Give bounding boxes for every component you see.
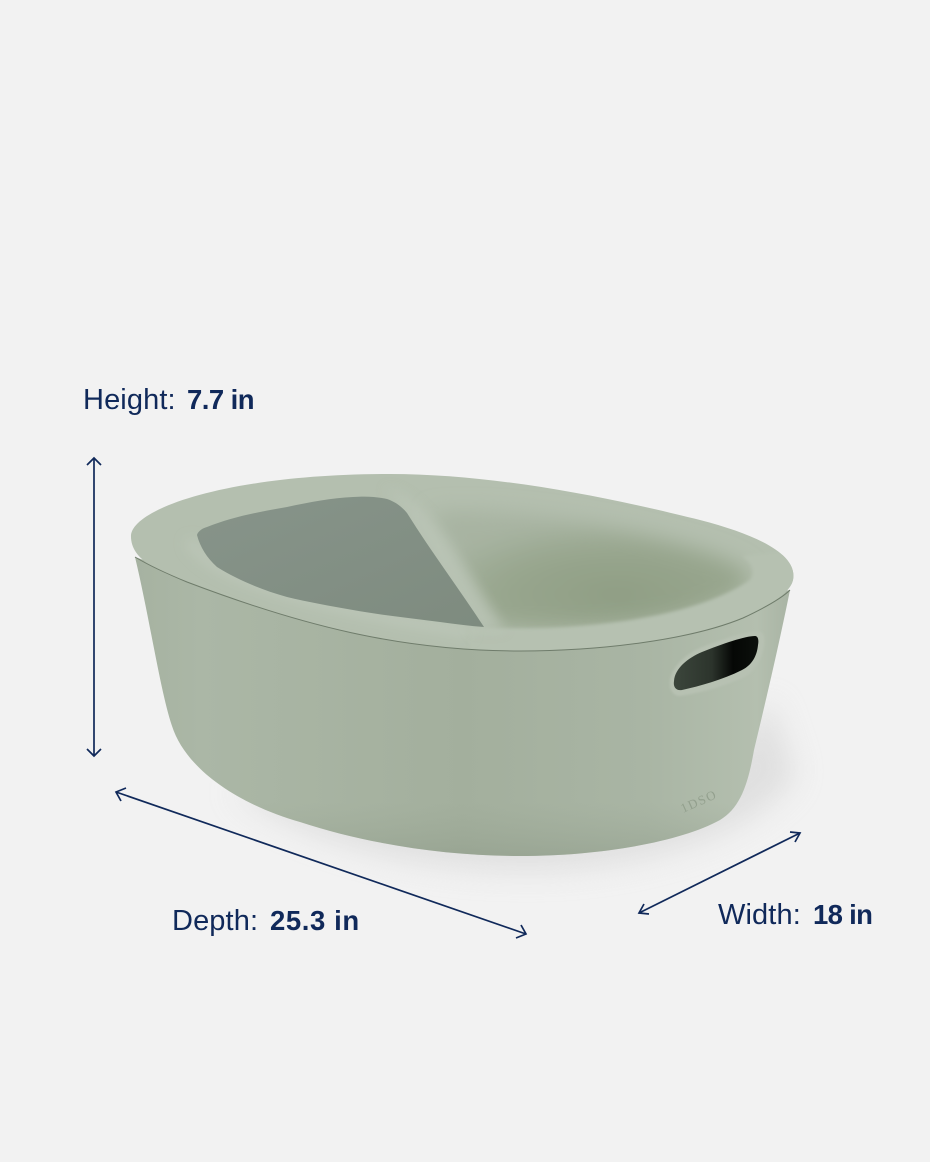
grey insert pad bbox=[197, 497, 484, 627]
front lip bbox=[494, 552, 794, 640]
handle opening bbox=[670, 631, 764, 696]
floor shadow bbox=[230, 700, 795, 870]
bowl divider highlight bbox=[432, 532, 502, 628]
arrow: height bbox=[87, 458, 101, 756]
bowl interior bbox=[430, 510, 752, 630]
embossed logo: 1DSO bbox=[678, 786, 719, 816]
label: width bbox=[718, 899, 872, 931]
label: height: 7.7 in bbox=[187, 384, 254, 415]
product illustration with dimension arrows bbox=[86, 456, 802, 939]
rim inner shading bbox=[443, 514, 794, 628]
label: depth: Depth: bbox=[172, 905, 258, 937]
tub rim bbox=[131, 474, 794, 650]
light band around pad bbox=[190, 540, 470, 632]
label: height bbox=[83, 384, 254, 416]
label: width: 18 in bbox=[813, 899, 872, 930]
label: width: Width: bbox=[718, 899, 801, 931]
arrow: depth bbox=[116, 788, 526, 938]
seam line bbox=[135, 557, 790, 651]
label: depth: 25.3 in bbox=[270, 905, 360, 936]
arrow: width bbox=[639, 832, 800, 914]
label: depth bbox=[172, 905, 360, 937]
tub body bbox=[135, 557, 790, 856]
label: height: Height: bbox=[83, 384, 176, 416]
